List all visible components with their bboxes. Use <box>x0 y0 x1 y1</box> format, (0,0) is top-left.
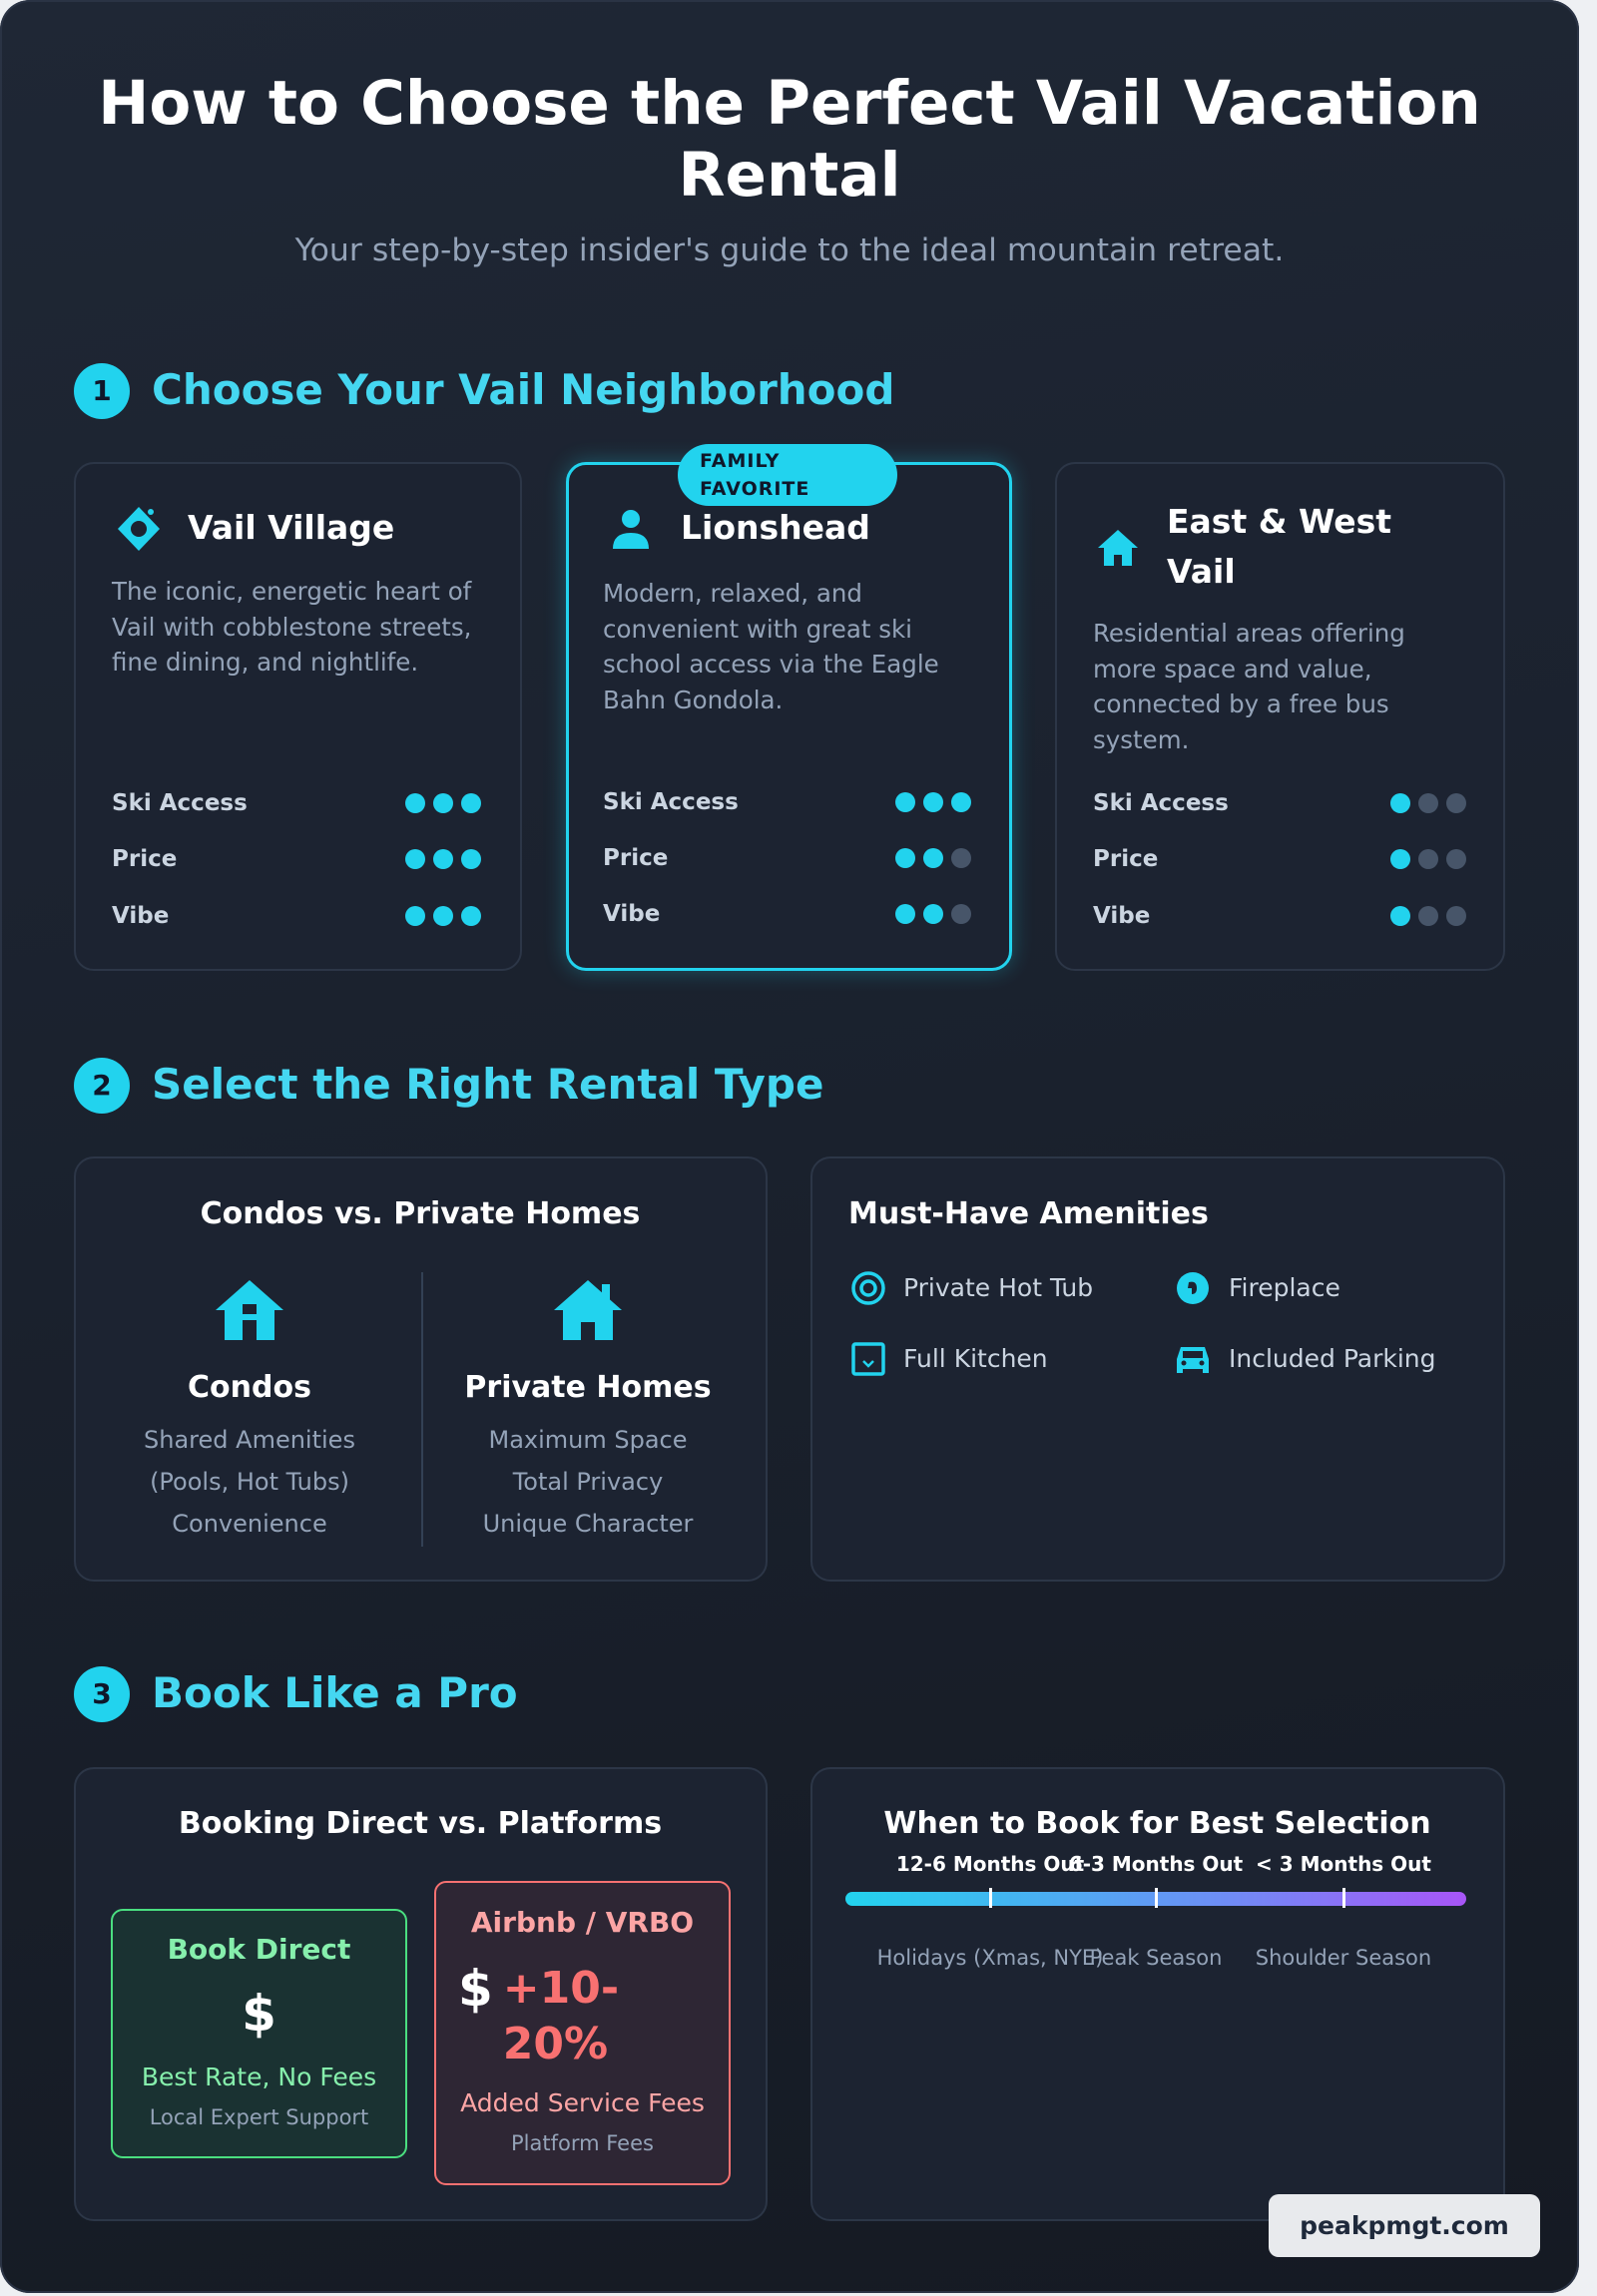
badge: family favorite: FAVORITE <box>700 478 809 500</box>
amenity: hot tub: Private Hot Tub <box>903 1273 1093 1302</box>
panel: must-have amenities <box>810 1156 1505 1582</box>
timeline chart: Peak Season <box>1090 1946 1222 1970</box>
description: Residential areas offering more space and value, connected by a free bus system. <box>1093 619 1405 754</box>
amenity: parking: Included Parking <box>1229 1344 1436 1373</box>
ratings: Price <box>1093 846 1158 872</box>
section 2 heading: Select the Right Rental Type <box>152 1060 823 1109</box>
column: private homes: Maximum Space <box>488 1426 688 1454</box>
ratings <box>603 789 971 927</box>
title <box>98 68 1481 211</box>
box: airbnb / vrbo: Added Service Fees <box>460 2088 705 2117</box>
watermark: peakpmgt.com <box>1300 2211 1509 2240</box>
icon: home <box>554 1280 622 1340</box>
ratings: Ski Access <box>603 789 739 815</box>
title: How to Choose the Perfect Vail Vacation <box>98 68 1481 139</box>
badge: family favorite: FAMILY <box>700 450 780 472</box>
timeline chart: < 3 Months Out <box>1256 1852 1431 1876</box>
box: airbnb / vrbo: $ <box>458 1960 493 2018</box>
amenity: fireplace: Fireplace <box>1229 1273 1340 1302</box>
timeline chart: Shoulder Season <box>1256 1946 1431 1970</box>
panel: condos vs private homes <box>74 1156 768 1582</box>
amenity: full kitchen <box>851 1342 1048 1376</box>
ratings <box>1093 790 1466 929</box>
amenity: fireplace <box>1177 1272 1340 1304</box>
timeline chart: 12-6 Months Out <box>896 1852 1084 1876</box>
icon: condo <box>216 1280 283 1340</box>
section 1 number: 1 <box>92 374 112 407</box>
subtitle: Your step-by-step insider's guide to the ideal mountain retreat. <box>295 232 1284 268</box>
timeline chart: Holidays (Xmas, NYE) <box>877 1946 1103 1970</box>
amenity: hot tub <box>851 1271 1093 1305</box>
icon: diamond <box>118 507 160 551</box>
title: Vail Village <box>188 508 394 547</box>
title <box>1167 502 1391 591</box>
ratings <box>112 790 481 929</box>
ratings: Ski Access <box>1093 790 1229 816</box>
panel title: Condos vs. Private Homes <box>201 1196 640 1231</box>
card: Vail Village <box>74 462 522 971</box>
panel title: When to Book for Best Selection <box>883 1806 1431 1841</box>
panel title: Booking Direct vs. Platforms <box>179 1806 662 1841</box>
timeline chart: 6-3 Months Out <box>1069 1852 1243 1876</box>
section 1 heading: Choose Your Vail Neighborhood <box>152 365 894 414</box>
panel title: Must-Have Amenities <box>848 1196 1209 1231</box>
ratings: Price <box>603 845 668 871</box>
column: private homes <box>464 1280 712 1538</box>
title: East & West <box>1167 502 1391 541</box>
column: condos: Convenience <box>172 1510 327 1538</box>
column: condos <box>144 1280 355 1538</box>
column: condos: (Pools, Hot Tubs) <box>150 1468 349 1496</box>
section 2 number <box>74 1058 130 1114</box>
ratings: Vibe <box>1093 903 1150 929</box>
box: book direct: Best Rate, No Fees <box>142 2063 376 2091</box>
card: Lionshead (highlighted) <box>566 462 1012 971</box>
panel: when to book timeline <box>810 1767 1505 2221</box>
box: airbnb / vrbo: +10- <box>503 1963 619 2014</box>
title: Vail <box>1167 552 1236 591</box>
box: book direct: Book Direct <box>168 1933 350 1966</box>
ratings: Vibe <box>112 903 169 929</box>
icon: person <box>613 510 649 549</box>
section 3 heading: Book Like a Pro <box>152 1668 518 1717</box>
section 3 number <box>74 1666 130 1722</box>
badge: family favorite <box>678 444 897 506</box>
title: Lionshead <box>681 508 870 547</box>
section 1 number <box>74 363 130 419</box>
section 3 number: 3 <box>92 1677 112 1710</box>
amenity: full kitchen: Full Kitchen <box>903 1344 1048 1373</box>
section 2 number: 2 <box>92 1069 112 1102</box>
icon: house <box>1098 530 1138 566</box>
box: book direct: Local Expert Support <box>150 2105 368 2129</box>
box: airbnb / vrbo: Airbnb / VRBO <box>471 1906 694 1939</box>
column: private homes: Private Homes <box>464 1370 712 1405</box>
column: condos: Shared Amenities <box>144 1426 355 1454</box>
box: airbnb / vrbo <box>434 1881 731 2185</box>
description: Modern, relaxed, and convenient with great ski school access via the Eagle Bahn Gondola. <box>603 579 939 714</box>
column: private homes: Unique Character <box>483 1510 693 1538</box>
title: Rental <box>678 140 900 211</box>
box: book direct <box>111 1909 407 2158</box>
timeline chart <box>845 1852 1466 1970</box>
box: airbnb / vrbo: Platform Fees <box>511 2131 654 2155</box>
box: book direct: $ <box>242 1985 276 2043</box>
column: private homes: Total Privacy <box>513 1468 663 1496</box>
ratings: Vibe <box>603 901 660 927</box>
panel: booking direct vs platforms <box>74 1767 768 2221</box>
watermark <box>1269 2194 1540 2257</box>
ratings: Ski Access <box>112 790 248 816</box>
card: East & West Vail <box>1055 462 1505 971</box>
box: airbnb / vrbo: 20% <box>503 2019 608 2069</box>
ratings: Price <box>112 846 177 872</box>
description: The iconic, energetic heart of Vail with cobblestone streets, fine dining, and nightlife. <box>112 577 471 677</box>
column: condos: Condos <box>188 1370 311 1405</box>
